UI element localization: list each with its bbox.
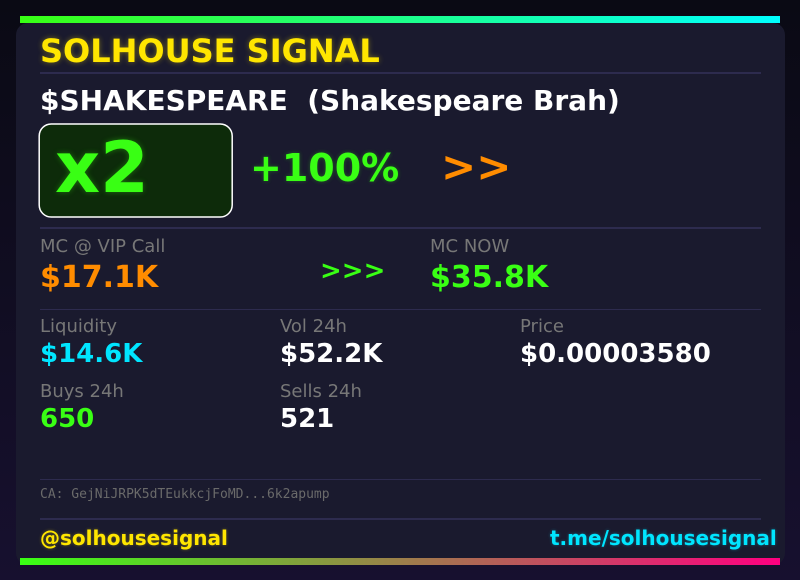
stat: sells	[280, 381, 362, 434]
stat: liquidity: $14.6K	[40, 339, 142, 369]
value: $17.1K	[40, 260, 158, 295]
stat: liquidity: Liquidity	[40, 316, 117, 337]
stat: MC now	[430, 236, 549, 295]
title: SOLHOUSE SIGNAL	[40, 32, 380, 70]
stat: volume	[280, 316, 384, 369]
stat: buys: Buys 24h	[40, 381, 124, 402]
percent gain: +100%	[250, 146, 399, 190]
stat: buys	[40, 381, 124, 434]
label: MC @ VIP Call	[40, 236, 165, 257]
arrow: green: >>>	[320, 256, 385, 286]
stat: sells: Sells 24h	[280, 381, 362, 402]
token name: $SHAKESPEARE (Shakespeare Brah)	[40, 84, 620, 117]
multiplier badge	[38, 123, 233, 218]
label: MC NOW	[430, 236, 509, 257]
top gradient bar	[20, 16, 780, 23]
bottom gradient bar	[20, 558, 780, 565]
footer handle: @solhousesignal	[40, 526, 228, 550]
stat: sells: 521	[280, 404, 334, 434]
stat: price	[520, 316, 711, 369]
stat: MC at VIP call	[40, 236, 165, 295]
multiplier value: x2	[55, 127, 149, 209]
stat: volume: Vol 24h	[280, 316, 347, 337]
arrow: orange: >>	[441, 142, 511, 191]
stat: liquidity	[40, 316, 144, 369]
stat: price: $0.00003580	[520, 339, 711, 369]
contract address: CA: GejNiJRPK5dTEukkcjFoMD...6k2apump	[40, 487, 330, 502]
stat: volume: $52.2K	[280, 339, 382, 369]
value: $35.8K	[430, 260, 548, 295]
stat: price: Price	[520, 316, 564, 337]
stat: buys: 650	[40, 404, 94, 434]
footer link: t.me/solhousesignal	[550, 526, 777, 550]
